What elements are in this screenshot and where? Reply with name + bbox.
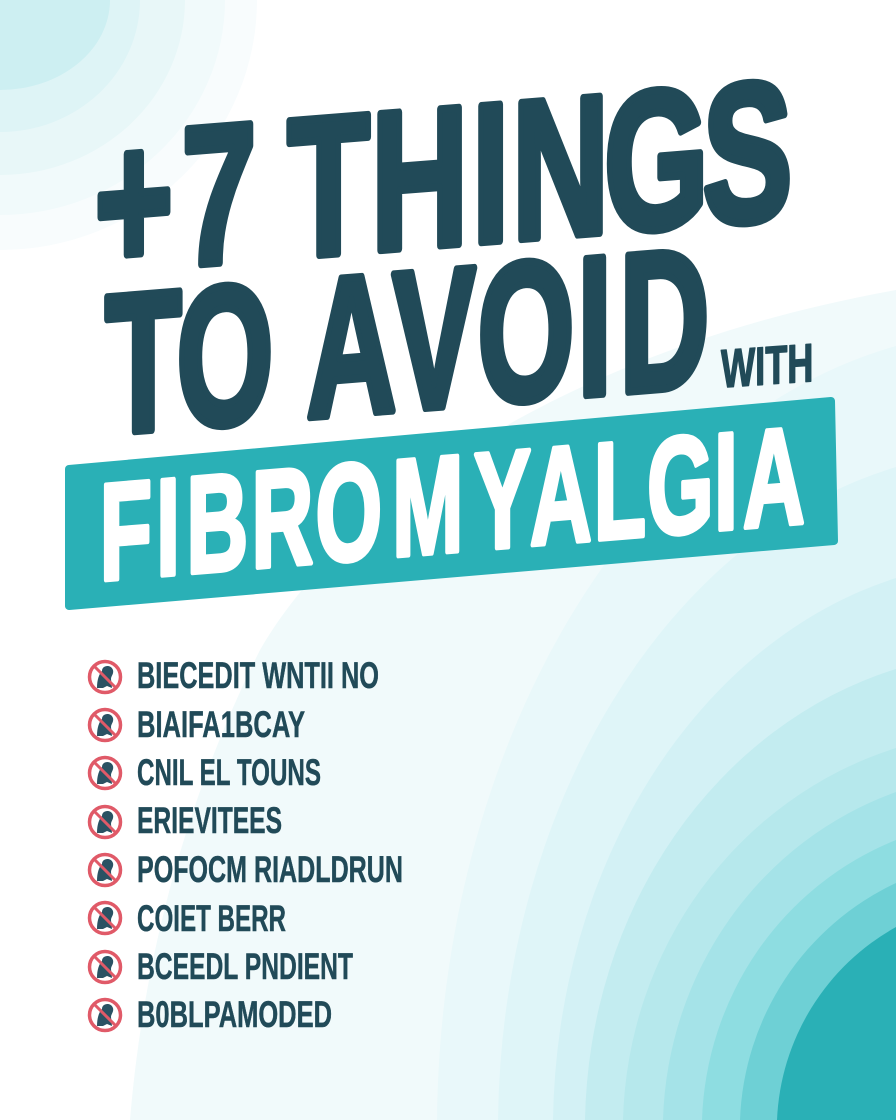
- item text: COIET BERR: [137, 898, 286, 939]
- icon: prohibition sign: [90, 952, 120, 982]
- word: with: WITH: [721, 332, 813, 399]
- icon: prohibition sign: [90, 1000, 120, 1030]
- list item 8: [90, 994, 332, 1035]
- list of things to avoid: [90, 655, 403, 1035]
- item text: B0BLPAMODED: [137, 994, 332, 1035]
- icon: prohibition sign: [90, 902, 120, 934]
- banner shape: [69, 401, 834, 606]
- item text: BIECEDIT WNTII NO: [137, 655, 379, 696]
- list item 1: [90, 655, 379, 696]
- icon: prohibition sign: [90, 662, 120, 692]
- list item 6: [90, 898, 286, 939]
- item text: BCEEDL PNDIENT: [137, 946, 353, 987]
- title: [95, 39, 813, 477]
- banner text: FIBROMYALGIA: [100, 399, 805, 610]
- item text: ERIEVITEES: [137, 800, 282, 841]
- list item 3: [90, 752, 321, 793]
- title line 1: +7 THINGS: [95, 39, 792, 315]
- icon: prohibition sign: [90, 806, 120, 838]
- item text: CNIL EL TOUNS: [137, 752, 321, 793]
- list item 7: [90, 946, 353, 987]
- title line 2: TO AVOID: [105, 207, 709, 477]
- item text: BIAIFA1BCAY: [137, 704, 305, 745]
- list item 5: [90, 849, 403, 890]
- list item 4: [90, 800, 282, 841]
- icon: prohibition sign: [90, 758, 120, 788]
- banner: fibromyalgia: [69, 399, 834, 610]
- icon: prohibition sign: [90, 710, 120, 740]
- list item 2: [90, 704, 305, 745]
- icon: prohibition sign: [90, 854, 120, 886]
- item text: POFOCM RIADLDRUN: [137, 849, 403, 890]
